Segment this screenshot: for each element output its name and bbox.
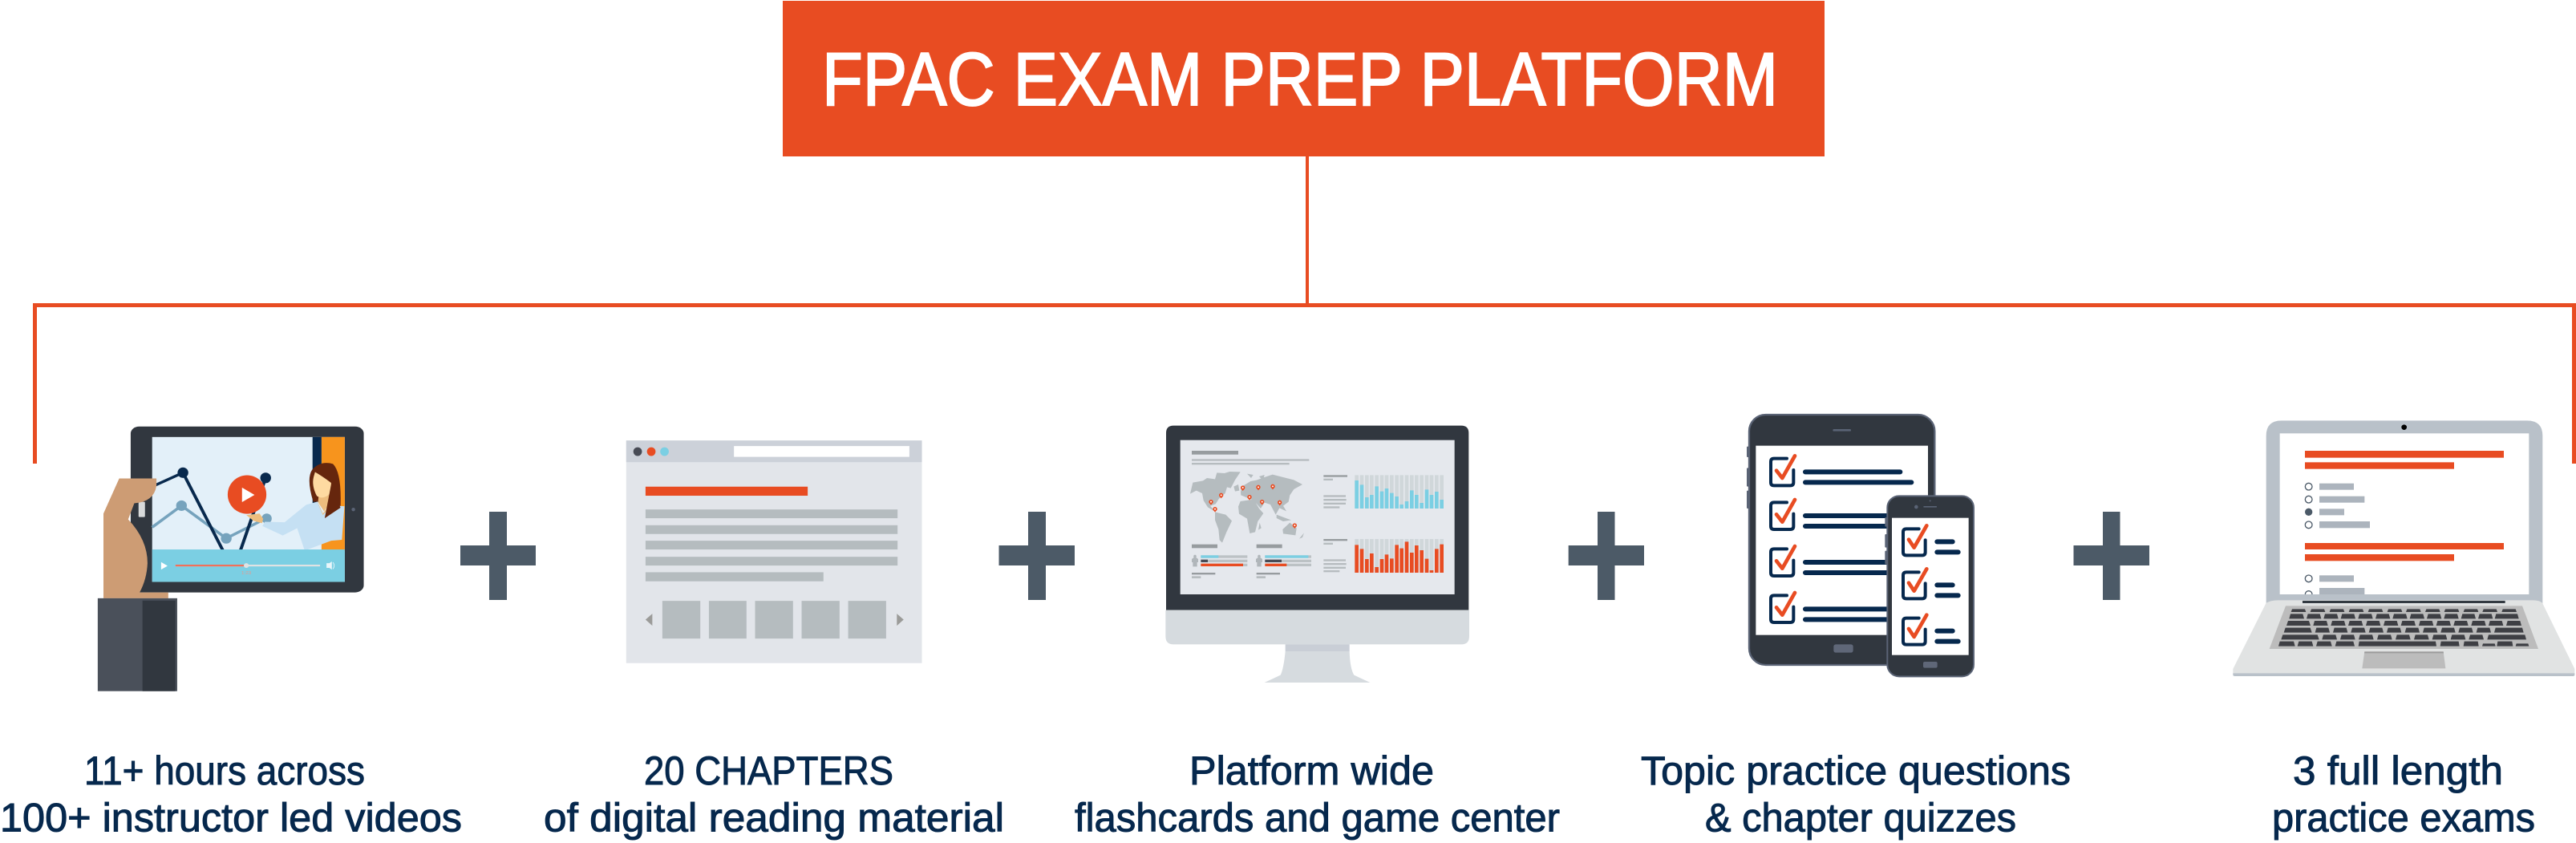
demographic stats <box>1192 545 1311 578</box>
label: videos <box>0 748 462 841</box>
icon: tablet video in hand <box>98 427 364 691</box>
label: flashcards <box>1075 748 1560 841</box>
icon: digital reading material browser <box>626 440 922 663</box>
label: chapters: 20 CHAPTERS <box>644 748 893 793</box>
plus sign 3 <box>1569 512 1644 600</box>
label: practice exams: practice exams <box>2272 796 2535 841</box>
plus sign 4 <box>2074 512 2149 600</box>
tablet <box>1747 415 1934 665</box>
title banner <box>783 1 1825 156</box>
phone <box>1885 496 1974 676</box>
label: flashcards: flashcards and game center <box>1075 796 1560 841</box>
chart captions <box>1323 475 1347 572</box>
label: videos: 100+ instructor led videos <box>0 796 462 841</box>
label: quizzes <box>1641 748 2071 841</box>
icon: laptop practice exam <box>2233 420 2574 676</box>
icon: tablet and phone quizzes <box>1747 415 1974 676</box>
connector lines <box>33 156 2576 464</box>
label: practice exams <box>2272 748 2535 841</box>
map pins <box>1209 484 1297 529</box>
icon: desktop monitor with dashboard <box>1165 426 1469 683</box>
label: videos: 11+ hours across <box>84 748 365 793</box>
label: chapters <box>544 748 1004 841</box>
plus sign 2 <box>999 512 1075 600</box>
label: chapters: of digital reading material <box>544 796 1004 841</box>
world map <box>1190 472 1304 543</box>
title banner: FPAC EXAM PREP PLATFORM <box>822 37 1778 121</box>
label: quizzes: & chapter quizzes <box>1705 796 2016 841</box>
label: quizzes: Topic practice questions <box>1641 748 2071 793</box>
label: practice exams: 3 full length <box>2293 748 2503 793</box>
label: flashcards: Platform wide <box>1189 748 1434 793</box>
bar chart: blue <box>1355 475 1444 509</box>
icon: tablet video in hand: 1:23 <box>241 571 251 576</box>
plus sign 1 <box>460 512 536 600</box>
bar chart: red <box>1355 539 1444 573</box>
